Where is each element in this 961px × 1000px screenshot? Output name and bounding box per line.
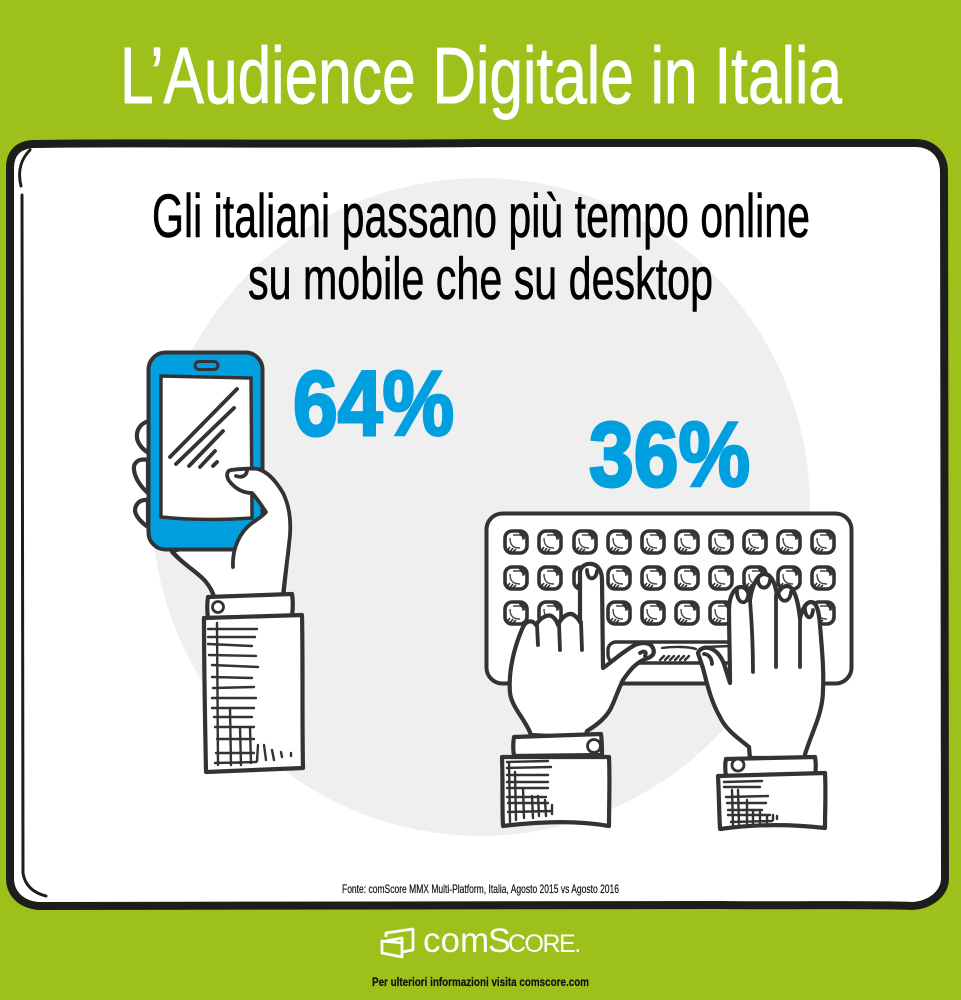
keys row 1 <box>505 531 834 553</box>
palm <box>172 469 289 598</box>
sleeve hatching <box>208 623 258 765</box>
space bar <box>608 642 738 663</box>
left cuff button <box>588 740 600 752</box>
wrist line <box>172 552 214 596</box>
left shirt cuff <box>513 734 602 756</box>
screen glare <box>170 389 237 467</box>
comScore logo <box>382 921 580 960</box>
logo wordmark: CORE. <box>508 930 580 958</box>
thumb and hand front <box>214 469 290 598</box>
left hand <box>510 564 654 738</box>
source note: Fonte: comScore MMX Multi-Platform, Italia, Agosto 2015 vs Agosto 2016 <box>342 882 619 896</box>
left sleeve hatching <box>507 761 552 822</box>
shirt sleeve <box>204 615 303 772</box>
heading: su mobile che su desktop <box>248 246 713 312</box>
desktop percentage: 36% <box>589 404 750 506</box>
logo wordmark: S <box>488 922 511 960</box>
phone screen <box>161 376 252 519</box>
keyboard body <box>486 514 852 684</box>
right hand <box>698 574 823 758</box>
thumb nail <box>236 471 247 477</box>
cuff button <box>212 602 224 612</box>
panel: main white frame <box>10 143 945 906</box>
background grey circle <box>152 178 810 836</box>
left hand finger creases and nail <box>537 570 646 656</box>
keys row 3 <box>505 602 834 624</box>
phone body <box>148 352 262 550</box>
mobile percentage: 64% <box>293 353 454 455</box>
right sleeve hatching <box>724 781 777 825</box>
footer link text: Per ulteriori informazioni visita comscore.com <box>372 975 589 989</box>
logo wordmark: com <box>423 921 489 960</box>
right shirt cuff <box>725 757 816 776</box>
logo icon <box>382 929 413 957</box>
icon: hand holding smartphone <box>134 352 303 772</box>
right hand finger creases and nails <box>704 578 813 672</box>
frame highlight stroke <box>20 150 46 896</box>
shirt cuff <box>207 594 293 618</box>
fingers behind phone <box>134 421 149 527</box>
icon: hands on keyboard <box>486 514 852 829</box>
right shirt sleeve <box>718 773 825 829</box>
phone speaker <box>195 362 218 370</box>
right cuff button <box>732 759 744 771</box>
keys row 2 <box>505 567 834 589</box>
left shirt sleeve <box>502 757 609 826</box>
heading <box>152 182 810 312</box>
